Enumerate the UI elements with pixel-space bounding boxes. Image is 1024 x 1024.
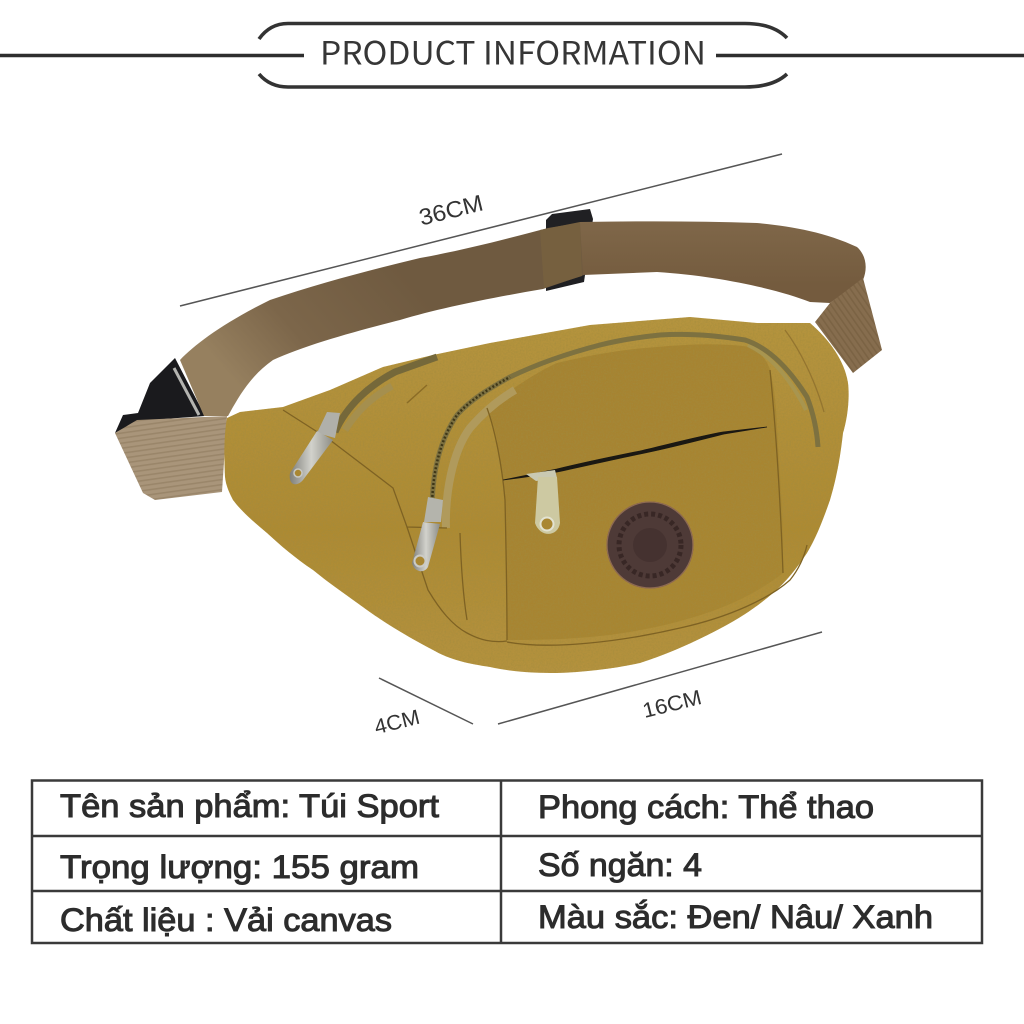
specification table [32,780,982,943]
row 3 left: material: Chất liệu : Vải canvas [60,902,392,938]
row 1 right: style: Phong cách: Thể thao [538,789,874,825]
dimension: 16cm height line and label [498,632,822,724]
strap: lower left webbing [115,416,227,500]
section heading: product information [0,24,1024,87]
strap: right webbing [815,278,882,373]
front pocket panel [487,344,783,640]
icon: main zipper pull [412,497,443,571]
icon: black buckle on left strap [115,358,205,433]
dimension: 36cm width line and label: 36CM [416,190,486,230]
seams: bag stitching [283,330,824,645]
table frame and grid [32,780,982,943]
icon: black buckle on top strap [546,209,593,291]
crease: upper bag fold [407,385,427,403]
zipper: pocket slit [503,427,767,480]
row 2 left: weight: Trọng lượng: 155 gram [60,849,419,885]
zipper: main front compartment [432,334,818,528]
zipper: rear compartment [335,357,437,432]
strap: right belt band [580,221,866,303]
section heading: product information: PRODUCT INFORMATION [320,28,706,74]
dimension: 4cm depth line and label: 4CM [372,706,422,739]
icon: leather badge [606,502,694,588]
strap: left belt band [180,222,584,416]
dimension: 16cm height line and label: 16CM [640,686,704,723]
icon: pocket zipper pull [526,470,560,534]
icon: rear zipper pull [290,412,340,484]
row 1 left: product name: Tên sản phẩm: Túi Sport [60,788,439,824]
row 3 right: colours: Màu sắc: Đen/ Nâu/ Xanh [538,899,933,935]
row 2 right: compartments: Số ngăn: 4 [538,847,702,883]
dimension: 4cm depth line and label [372,678,473,739]
product illustration: waist bag [115,209,882,673]
bag body [224,317,849,673]
dimension: 36cm width line and label [180,154,782,306]
